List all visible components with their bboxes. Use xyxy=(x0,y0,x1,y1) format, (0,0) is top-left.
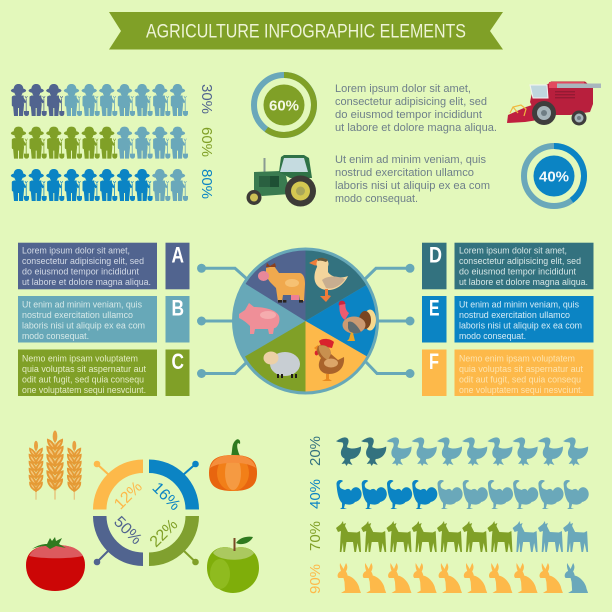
panel E: E xyxy=(429,296,440,321)
text block: lorem ipsum: do eiusmod tempor incididunt xyxy=(335,109,483,121)
ring chart: crop shares: 50% xyxy=(110,513,145,548)
title banner xyxy=(109,12,503,50)
donut: 60% xyxy=(254,75,314,135)
panel B: Ut enim ad minim veniam, quis xyxy=(22,300,142,310)
panel B: laboris nisi ut aliquip ex ea com xyxy=(22,320,145,330)
pictogram: rabbits 90% xyxy=(307,563,588,594)
icon: pumpkin xyxy=(209,439,257,491)
panel D: Lorem ipsum dolor sit amet, xyxy=(459,246,567,256)
text block: ut enim: modo consequat. xyxy=(335,193,418,205)
panel F: quia voluptas sit aspernatur aut xyxy=(459,364,583,374)
pictogram: farmers 30% xyxy=(11,84,215,116)
panel A: do eiusmod tempor incididunt xyxy=(22,266,139,276)
icon: pig xyxy=(239,303,279,334)
pictogram: rabbits 90%: 90% xyxy=(307,564,324,594)
panel C: odit aut fugit, sed quia consequ xyxy=(22,374,144,384)
panel E xyxy=(422,296,594,342)
panel F: one voluptatem sequi nesvciunt. xyxy=(459,385,583,395)
title banner: AGRICULTURE INFOGRAPHIC ELEMENTS xyxy=(146,22,466,43)
panel E: laboris nisi ut aliquip ex ea com xyxy=(459,320,582,330)
text block: ut enim xyxy=(335,154,490,205)
panel C: quia voluptas sit aspernatur aut xyxy=(22,364,146,374)
pictogram: farmers 60%: 60% xyxy=(198,127,215,157)
text block: lorem ipsum: ut labore et dolore magna aliqua. xyxy=(335,122,497,134)
panel A: consectetur adipisicing elit, sed xyxy=(22,256,144,266)
panel C: C xyxy=(172,349,184,374)
panel D xyxy=(422,243,594,289)
panel C: one voluptatem sequi nesvciunt. xyxy=(22,385,146,395)
icon: duck xyxy=(309,258,348,302)
panel C xyxy=(18,349,190,396)
text block: ut enim: Ut enim ad minim veniam, quis xyxy=(335,154,486,166)
pictogram: farmers 80% xyxy=(11,169,215,201)
pictogram: goats 70%: 70% xyxy=(307,521,324,551)
panel C: Nemo enim ipsam voluptatem xyxy=(22,354,138,364)
panel E: modo consequat. xyxy=(459,331,526,341)
pictogram: farmers 30%: 30% xyxy=(198,84,215,114)
pictogram: turkeys 40%: 40% xyxy=(307,479,324,509)
donut: 40% xyxy=(524,146,584,206)
pictogram: ducks 20% xyxy=(307,436,588,466)
panel E: nostrud exercitation ullamco xyxy=(459,310,570,320)
panel F xyxy=(422,349,594,396)
ring chart: crop shares: 12% xyxy=(111,478,146,513)
icon: tomato xyxy=(26,537,85,591)
panel D: D xyxy=(429,243,442,268)
icon: cow xyxy=(258,263,305,303)
pictogram: turkeys 40% xyxy=(307,479,589,509)
panel F: Nemo enim ipsam voluptatem xyxy=(459,354,575,364)
donut: 40%: 40% xyxy=(539,168,569,186)
panel A xyxy=(18,243,190,289)
icon: wheat xyxy=(30,431,81,500)
icon: sheep xyxy=(264,352,300,378)
text block: lorem ipsum xyxy=(335,83,497,134)
text block: lorem ipsum: Lorem ipsum dolor sit amet, xyxy=(335,83,471,95)
panel D: ut labore et dolore magna aliqua. xyxy=(459,277,588,287)
panel B: modo consequat. xyxy=(22,331,89,341)
pictogram: farmers 60% xyxy=(11,127,215,159)
icon: apple xyxy=(207,537,259,593)
panel F: odit aut fugit, sed quia consequ xyxy=(459,374,581,384)
panel D: consectetur adipisicing elit, sed xyxy=(459,256,581,266)
panel A: A xyxy=(172,243,184,268)
pie chart with animals xyxy=(234,249,378,393)
connectors: pie to panels xyxy=(197,264,414,378)
panel D: do eiusmod tempor incididunt xyxy=(459,266,576,276)
icon: turkey xyxy=(339,301,376,341)
panel A: Lorem ipsum dolor sit amet, xyxy=(22,246,130,256)
pictogram: ducks 20%: 20% xyxy=(307,436,324,466)
panel F: F xyxy=(429,349,439,374)
pictogram: goats 70% xyxy=(307,521,588,552)
panel E: Ut enim ad minim veniam, quis xyxy=(459,300,579,310)
connector dots xyxy=(94,461,199,565)
text block: ut enim: laboris nisi ut aliquip ex ea com xyxy=(335,180,490,192)
icon: combine harvester xyxy=(507,82,601,126)
icon: chicken xyxy=(314,339,344,381)
text block: ut enim: nostrud exercitation ullamco xyxy=(335,167,474,179)
icon: tractor xyxy=(246,155,316,206)
panel B: B xyxy=(172,296,184,321)
panel B: nostrud exercitation ullamco xyxy=(22,310,133,320)
panel B xyxy=(18,296,190,342)
ring chart: crop shares xyxy=(93,460,199,566)
ring chart: crop shares: 16% xyxy=(149,479,183,514)
ring chart: crop shares: 22% xyxy=(147,516,181,551)
panel A: ut labore et dolore magna aliqua. xyxy=(22,277,151,287)
donut: 60%: 60% xyxy=(269,98,299,114)
pictogram: farmers 80%: 80% xyxy=(198,169,215,199)
text block: lorem ipsum: consectetur adipisicing elit, sed xyxy=(335,96,487,108)
